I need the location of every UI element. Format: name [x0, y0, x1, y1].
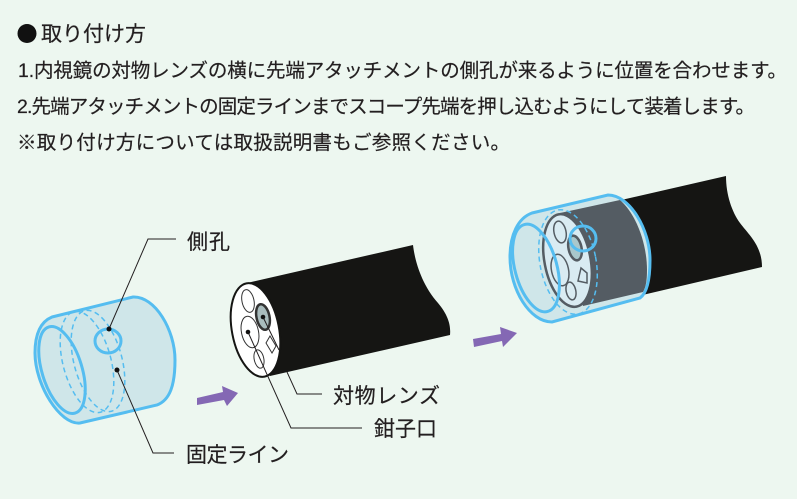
scope tip face	[223, 279, 288, 381]
fixing line dashed rings	[59, 310, 126, 414]
face channels	[548, 220, 587, 301]
objective lens	[254, 303, 272, 331]
label: objective lens: 対物レンズ	[333, 385, 440, 408]
square element	[266, 336, 276, 353]
side hole	[570, 226, 596, 251]
objective lens	[566, 234, 584, 262]
attachment body	[510, 195, 650, 322]
note: ※取り付け方については取扱説明書もご参照ください。	[17, 132, 510, 154]
label: forceps port: 鉗子口	[374, 418, 437, 441]
instructions text block	[17, 23, 787, 154]
heading bullet	[18, 24, 36, 43]
attachment body	[35, 297, 175, 423]
scope body	[247, 245, 450, 376]
scope diagram	[223, 245, 450, 381]
label: fixing line: 固定ライン	[186, 444, 289, 467]
open end	[504, 219, 568, 317]
side hole	[95, 329, 121, 353]
arrow 2	[473, 327, 517, 347]
label: side hole: 側孔	[187, 231, 230, 254]
step 2: 2.先端アタッチメントの固定ラインまでスコープ先端を押し込むようにして装着します。	[17, 96, 755, 118]
large channel	[238, 315, 262, 349]
step 1: 1.内視鏡の対物レンズの横に先端アタッチメントの側孔が来るように位置を合わせます。	[18, 60, 787, 82]
attachment diagram	[30, 297, 175, 423]
dashed fixing ring	[538, 209, 598, 315]
scope body	[560, 176, 762, 309]
covered scope section	[560, 200, 647, 306]
leader: side hole	[106, 239, 176, 332]
open end	[30, 321, 94, 419]
leader: forceps port	[246, 330, 362, 428]
leader: fixing line	[114, 368, 174, 453]
channel circle	[240, 289, 256, 313]
heading: 取り付け方	[41, 23, 146, 46]
attachment outline	[510, 195, 650, 322]
leader: objective lens	[261, 315, 322, 394]
tip face	[536, 210, 599, 311]
assembled diagram	[504, 176, 762, 322]
arrow 1	[197, 386, 238, 406]
small channel	[252, 349, 266, 369]
